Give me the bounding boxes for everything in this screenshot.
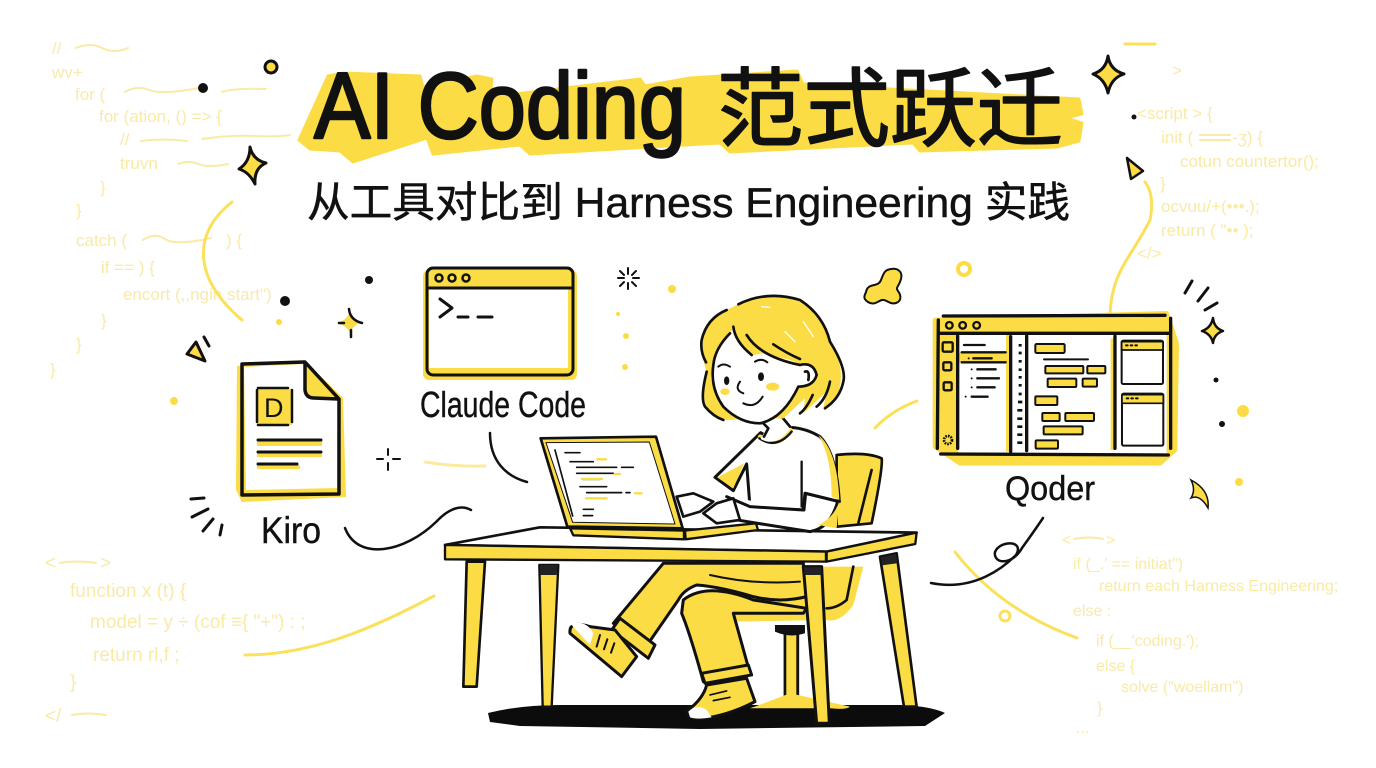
background code: bottom left [45, 553, 306, 727]
background code: bottom right: solve ("woellam") [1121, 679, 1244, 696]
connector squiggles [345, 433, 1043, 585]
icon: Kiro document: D [264, 393, 284, 423]
background code: top right [1137, 61, 1319, 263]
background code: top right: > [1172, 61, 1182, 80]
crossed leg [570, 563, 807, 677]
background code: top left: // [52, 39, 62, 58]
background code: top right: return ( "•• ); [1161, 221, 1254, 240]
background code: top right: } [1160, 174, 1166, 193]
background code: top left: for (ation, () => { [99, 107, 222, 126]
background code: bottom left: return rl,f ; [93, 645, 180, 666]
background code: bottom left: function x (t) { [70, 581, 187, 602]
title [314, 53, 1063, 158]
background code: top left: wv+ [51, 63, 83, 82]
background code: bottom right: > [1106, 532, 1115, 549]
chair [727, 454, 882, 709]
background code: top right: cotun countertor(); [1180, 152, 1319, 171]
title: AI Coding [314, 53, 686, 158]
background code: top left: for ( [75, 85, 106, 104]
icon: Qoder IDE window [935, 313, 1177, 463]
background code: top left: encort (,,ngin start") [123, 285, 272, 304]
subtitle: 从工具对比到 Harness Engineering 实践 [307, 179, 1070, 226]
background code: bottom right: < [1062, 532, 1071, 549]
background code: top left: } [76, 201, 82, 220]
background code: bottom left: model = y ÷ (cof ≡{ "+") : ; [90, 612, 306, 633]
background code: bottom right: } [1097, 700, 1103, 717]
floor shadow [488, 705, 945, 729]
title: 范式跃迁 [717, 62, 1063, 158]
background code: top left: } [101, 311, 107, 330]
table [445, 527, 917, 723]
background code: bottom right: return each Harness Engineering; [1099, 578, 1338, 595]
background code: top right: ocvuu/+(•••.); [1161, 197, 1260, 216]
background code: top left: catch ( [76, 231, 127, 250]
background code: bottom right: ... [1076, 720, 1089, 737]
background code: top right: </> [1137, 244, 1162, 263]
background code: top left: truvn [120, 154, 158, 173]
icon: Kiro document [236, 360, 346, 502]
background code: bottom right: if (_.' == initiat") [1073, 556, 1183, 573]
background code: bottom right [1062, 532, 1338, 737]
background code: top left: } [100, 178, 106, 197]
head and hair [701, 296, 844, 442]
background code: bottom right: else { [1096, 658, 1136, 675]
background code: top right: -ʒ) { [1232, 128, 1263, 147]
shirt and arm [677, 427, 839, 532]
background code: top left [50, 39, 290, 379]
label: Kiro: Kiro [261, 510, 321, 551]
background code: bottom left: </ [45, 706, 62, 727]
background code: top left: } [76, 335, 82, 354]
background code: top left: } [50, 360, 56, 379]
background code: bottom right: if (__'coding.'); [1096, 633, 1199, 650]
background code: top left: // [120, 130, 130, 149]
background code: top right: <script > { [1137, 104, 1213, 123]
back leg [682, 591, 807, 719]
label: Claude Code: Claude Code [420, 384, 586, 425]
background code: top left: ) { [226, 231, 242, 250]
laptop [541, 437, 758, 539]
background code: bottom right: else : [1073, 603, 1111, 620]
icon: Claude Code terminal window [423, 268, 577, 380]
illustration: person at desk with laptop [445, 427, 917, 723]
background code: bottom left: > [100, 553, 111, 574]
label: Qoder: Qoder [1005, 470, 1095, 508]
title highlight brush [299, 71, 1082, 162]
background code: bottom left: } [70, 672, 76, 693]
decorative dots, sparkles and marks [170, 56, 1249, 535]
background code: bottom left: < [45, 553, 56, 574]
background code: top right: init ( [1161, 128, 1193, 147]
background code: top left: if == ) { [101, 258, 155, 277]
yellow connector curves [203, 44, 1155, 655]
